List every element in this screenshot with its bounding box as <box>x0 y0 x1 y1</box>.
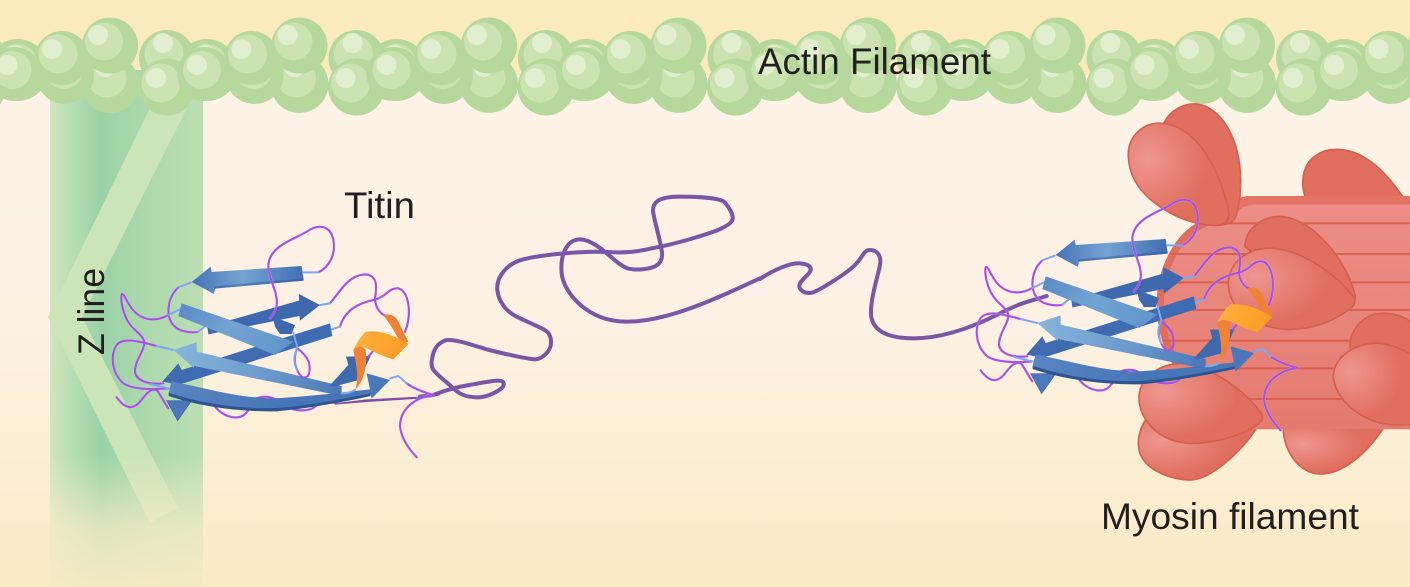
filament body <box>1150 196 1410 429</box>
left domain ribbon <box>113 227 433 457</box>
actin filament <box>0 18 1410 116</box>
head behind body: lower right <box>1283 428 1383 474</box>
label: Z line: Z line <box>71 268 112 355</box>
label: Actin Filament: Actin Filament <box>758 41 992 82</box>
label: Titin: Titin <box>344 185 415 226</box>
head: bottom left <box>1139 363 1262 443</box>
head: right lower <box>1350 313 1410 367</box>
Z line band <box>48 70 203 587</box>
head: middle <box>1245 217 1355 313</box>
label: Myosin filament: Myosin filament <box>1101 496 1360 537</box>
head behind body: lower left <box>1138 418 1257 480</box>
titin unfolded chain <box>420 197 1047 397</box>
chain connector behind the left domain <box>333 393 440 405</box>
protein domain: right <box>977 200 1297 430</box>
protein domain: left <box>113 227 440 457</box>
head behind body: upper right <box>1303 149 1403 197</box>
head: top <box>1163 104 1241 225</box>
myosin filament <box>1128 104 1410 480</box>
